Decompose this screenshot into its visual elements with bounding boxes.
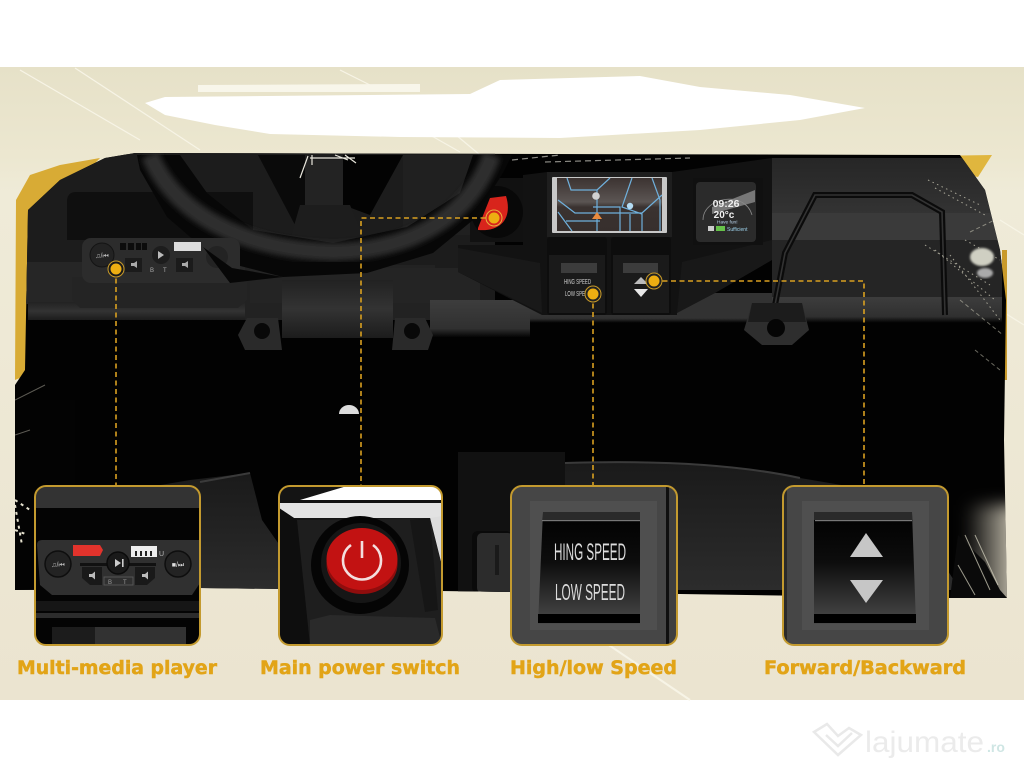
panel: main power switch — [279, 486, 442, 645]
digital gauge screen: 09:26 — [713, 198, 740, 210]
media player: ♫/⏮ — [95, 253, 109, 260]
digital gauge screen: Have fun! — [717, 220, 738, 226]
panel: multi-media player: U — [159, 551, 164, 558]
upper dash left — [15, 153, 495, 303]
centre block and mounts — [238, 297, 433, 350]
panel: multi-media player — [35, 486, 200, 645]
wheel over player — [203, 247, 283, 283]
floor — [18, 461, 952, 590]
grey splash — [970, 248, 994, 266]
top edge scratches — [300, 155, 690, 178]
left edge scratches — [15, 385, 45, 545]
digital gauge screen — [696, 182, 756, 242]
panel: multi-media player: T — [123, 580, 127, 586]
label: forward/backward: Forward/Backward — [764, 657, 966, 679]
label: high/low speed: High/low Speed — [510, 657, 677, 679]
panel: multi-media player: B — [108, 580, 112, 586]
connector: multimedia — [108, 261, 124, 485]
panel: multi-media player: ■/⏭ — [172, 562, 185, 569]
centre pedestal — [458, 452, 565, 594]
power recess — [470, 178, 523, 242]
media player — [72, 238, 247, 308]
connector: power switch — [361, 210, 502, 485]
digital gauge screen: Sufficient — [727, 227, 748, 233]
yellow torn edge accents — [15, 155, 1007, 380]
dashboard photo — [15, 153, 1024, 615]
steering wheel — [137, 155, 512, 277]
panel: high/low speed switch: HING SPEED — [554, 539, 626, 566]
label: multi-media player: Multi-media player — [17, 657, 218, 679]
digital gauge screen: 20°c — [714, 210, 735, 221]
speed switch on dash: HING SPEED — [564, 279, 591, 286]
panel: high/low speed switch: LOW SPEED — [555, 579, 625, 605]
label: main power switch: Main power switch — [260, 657, 460, 679]
direction switch on dash — [623, 263, 658, 297]
right edge speckles — [925, 180, 1005, 595]
speed switch on dash — [561, 263, 597, 296]
panel: forward/backward switch — [783, 486, 948, 645]
watermark logo: lajumate — [865, 726, 984, 759]
lower-right fade — [963, 493, 1007, 598]
media player: B — [150, 268, 154, 274]
dash shelf left — [28, 304, 245, 320]
map screen — [547, 172, 672, 237]
mid dash band — [250, 268, 480, 303]
watermark logo: .ro — [987, 739, 1005, 755]
speed switch on dash: LOW SPEED — [565, 291, 591, 298]
connector: direction switch — [646, 273, 864, 485]
watermark logo — [814, 724, 1005, 759]
media player: T — [163, 268, 167, 274]
left recess — [67, 192, 253, 240]
right dash panel — [772, 158, 1002, 213]
pedal — [477, 533, 510, 592]
right mount — [744, 303, 809, 345]
centre console — [458, 158, 772, 315]
panel: high/low speed switch — [511, 486, 677, 645]
white knob — [339, 405, 359, 414]
wiring line on right panel — [775, 195, 945, 315]
dash band behind mounts — [245, 303, 430, 320]
panel: multi-media player: ♫/⏮ — [51, 562, 65, 569]
connector: speed switch — [585, 286, 601, 485]
white brush stroke banner — [145, 76, 865, 138]
wheel opening shading — [258, 155, 305, 225]
